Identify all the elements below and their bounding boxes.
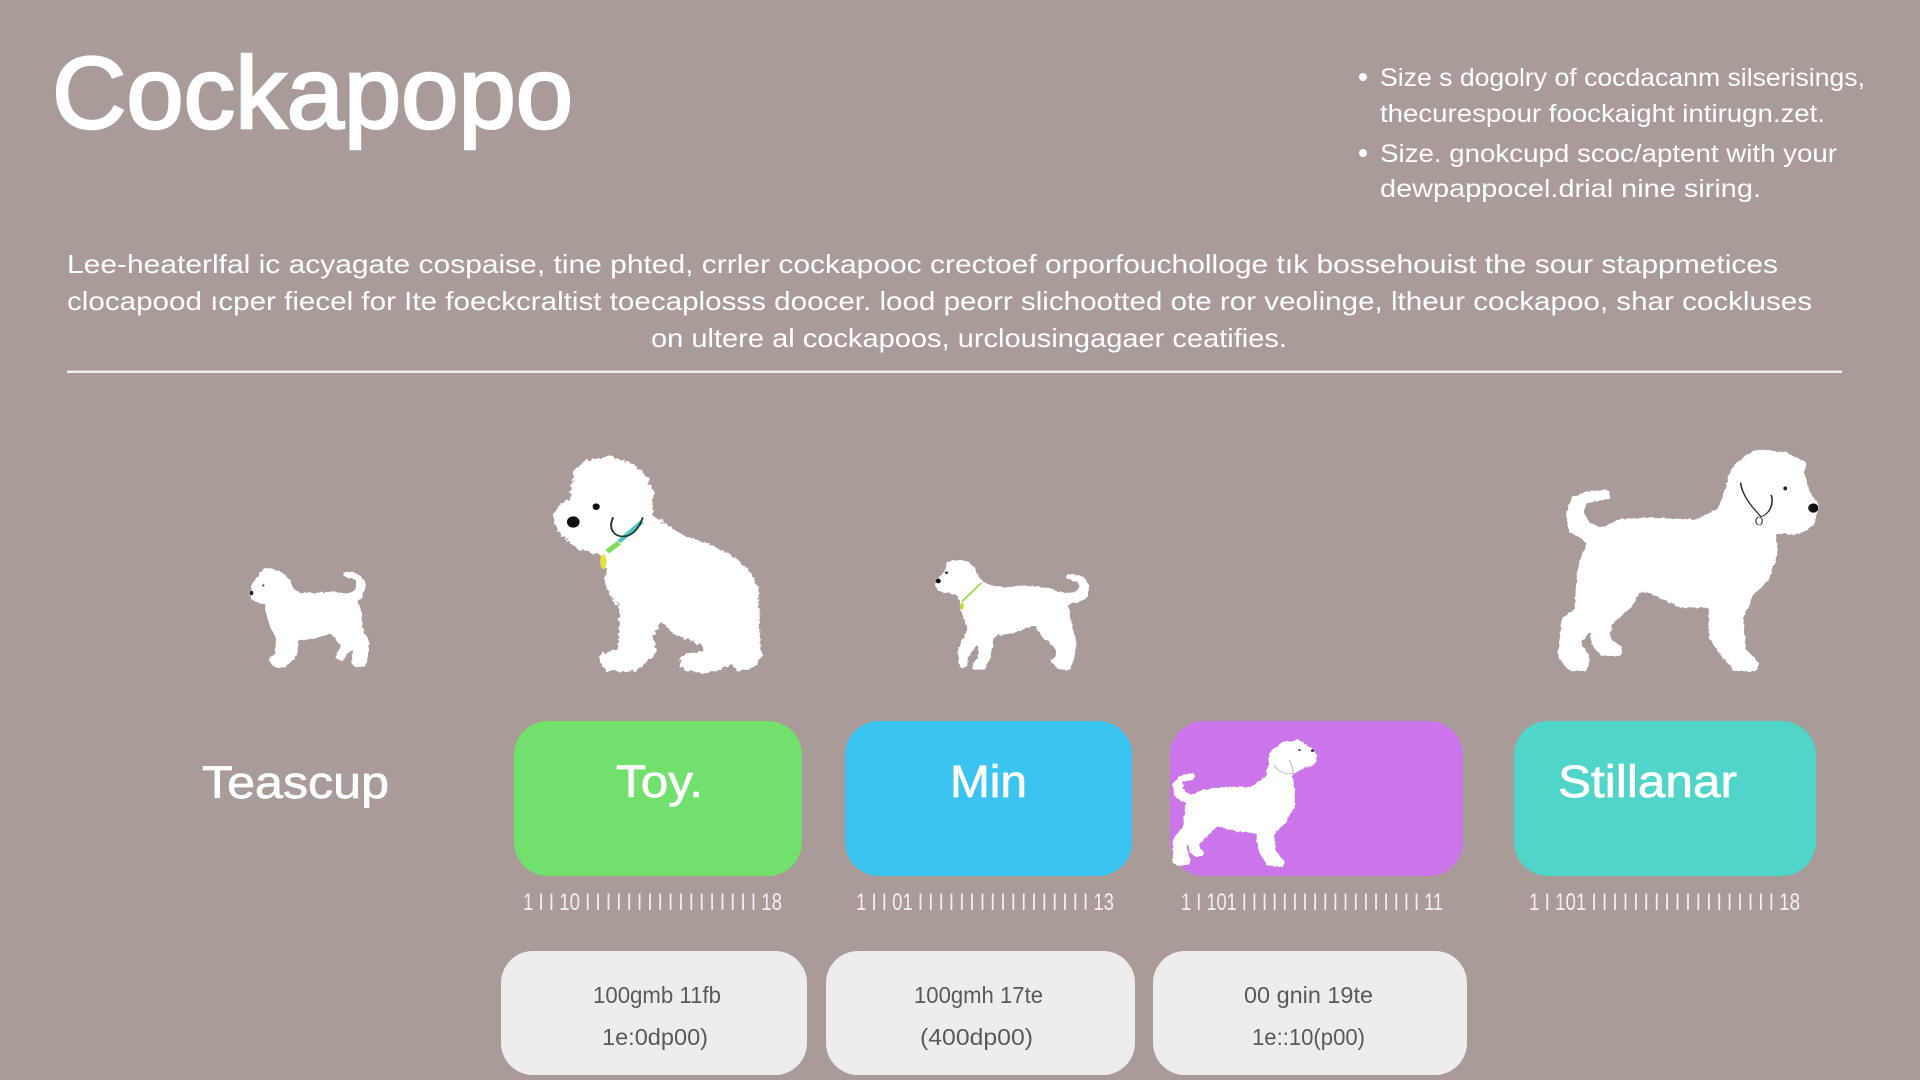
bullet 2: Size. gnokcupd scoc/aptent with your [1380, 140, 1837, 168]
info card 1: 1e:0dp00) [602, 1024, 708, 1050]
label: teacup: Teascup [202, 757, 389, 808]
info card 3 [1153, 951, 1467, 1075]
bullet 2 [1359, 140, 1837, 203]
bullet 2: dewpappocel.drial nine siring. [1380, 175, 1761, 203]
dog: teascup [249, 569, 368, 668]
dog in purple card [1173, 741, 1316, 866]
title: Cockapopo [52, 36, 573, 150]
bullet 1: Size s dogolry of cocdacanm silserisings, [1380, 64, 1865, 92]
info card 2: 100gmh 17te [914, 982, 1043, 1008]
info card 1: 100gmb 11fb [593, 982, 721, 1008]
info card 3: 00 gnin 19te [1244, 982, 1373, 1008]
card: standard: Stillanar [1558, 756, 1737, 807]
ruler: standard: 1 I 101 I I I I I I I I I I I I I I I I I I 18 [1529, 889, 1800, 916]
info card 2: (400dp00) [920, 1024, 1033, 1050]
intro paragraph [67, 249, 1812, 353]
intro paragraph: clocapood ıcper fiecel for Ite foeckcraltist toecaplosss doocer. lood peorr slichootted ote ror veolinge, ltheur cockapoo, shar cockluses [67, 286, 1812, 316]
intro paragraph: on ultere al cockapoos, urclousingagaer ceatifies. [651, 323, 1287, 353]
card: mini [845, 721, 1132, 876]
dog: mini [936, 561, 1088, 669]
bullet list [1359, 64, 1865, 203]
card: toy: Toy. [616, 756, 703, 807]
intro paragraph: Lee-heaterlfal ic acyagate cospaise, tine phted, crrler cockapooc crectoef orporfouchollоge tık bossehouist the sour stappmetices [67, 249, 1778, 279]
ruler: mini: 1 I I 01 I I I I I I I I I I I I I I I I I 13 [856, 889, 1114, 916]
card: standard [1514, 721, 1816, 876]
dog: standard [1559, 450, 1818, 671]
card: medium with dog [1170, 721, 1463, 876]
dog: toy [554, 457, 761, 672]
info card 2 [826, 951, 1135, 1075]
ruler: toy: 1 I I 10 I I I I I I I I I I I I I I I I I 18 [523, 889, 782, 916]
card: toy [514, 721, 802, 876]
bullet 1: thecurespour foockaight intirugn.zet. [1380, 100, 1825, 128]
ruler: medium: 1 I 101 I I I I I I I I I I I I I I I I I I 11 [1181, 889, 1443, 916]
card: mini: Min [950, 756, 1027, 807]
bullet 1 [1359, 64, 1865, 128]
info card 3: 1e::10(p00) [1252, 1024, 1365, 1050]
info card 1 [501, 951, 807, 1075]
